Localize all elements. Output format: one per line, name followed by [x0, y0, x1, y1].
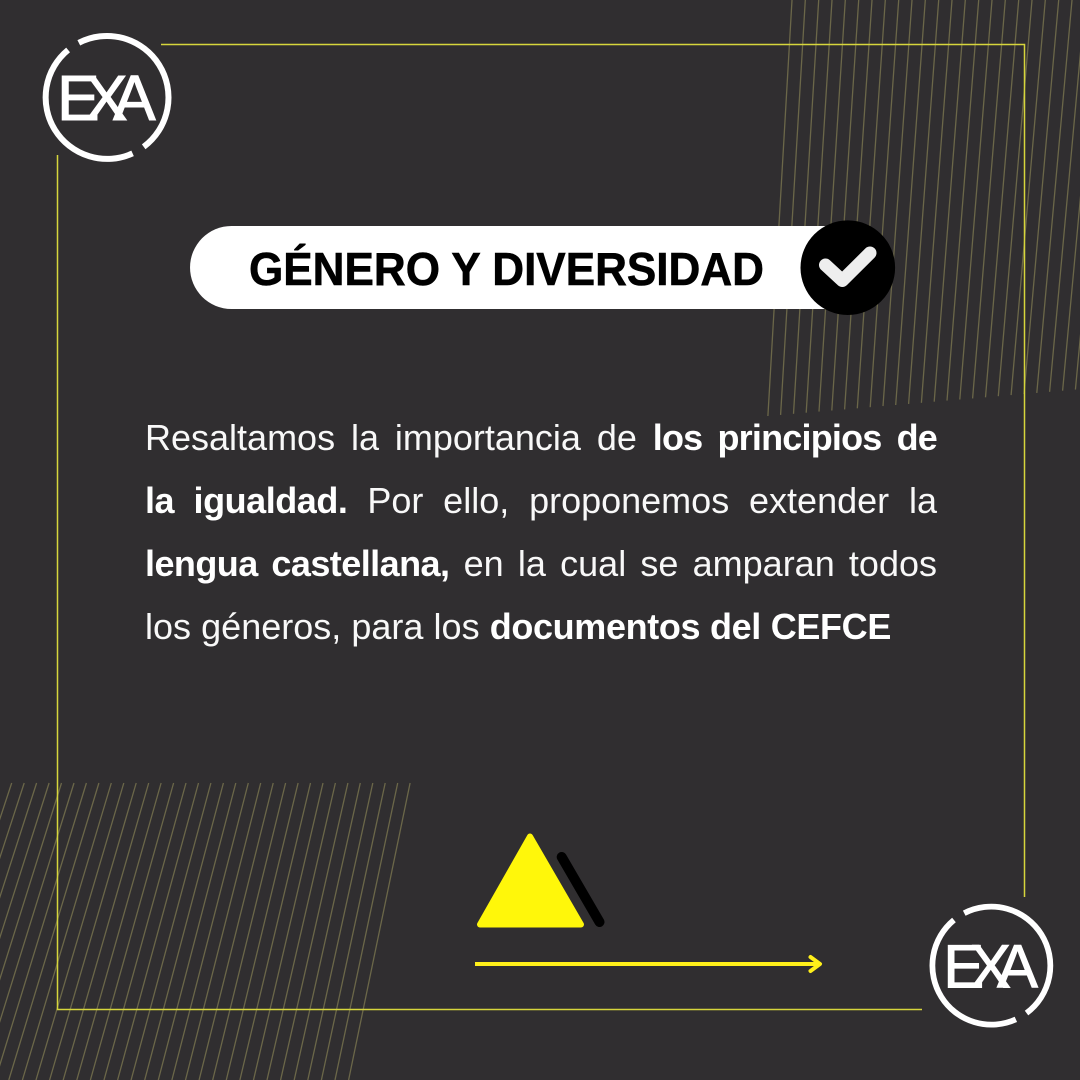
line 2: la igualdad. Por ello, proponemos extender la: [145, 480, 937, 521]
line 3: lengua castellana, en la cual se amparan todos: [145, 543, 937, 584]
body text: [145, 417, 938, 647]
title: GÉNERO Y DIVERSIDAD: [249, 243, 764, 295]
logo: EXA top left: EXA: [57, 62, 156, 134]
title pill: [190, 226, 826, 309]
logo: EXA top left: [46, 36, 168, 159]
icon: yellow triangle with black bar: [480, 836, 600, 924]
logo: EXA bottom right: [932, 907, 1050, 1025]
logo: EXA bottom right: EXA: [943, 932, 1038, 1001]
line 1: Resaltamos la importancia de los principios de: [145, 417, 937, 458]
line 4: los géneros, para los documentos del CEFCE: [145, 606, 891, 647]
icon: check mark badge: [800, 220, 895, 315]
arrow: [475, 957, 820, 971]
